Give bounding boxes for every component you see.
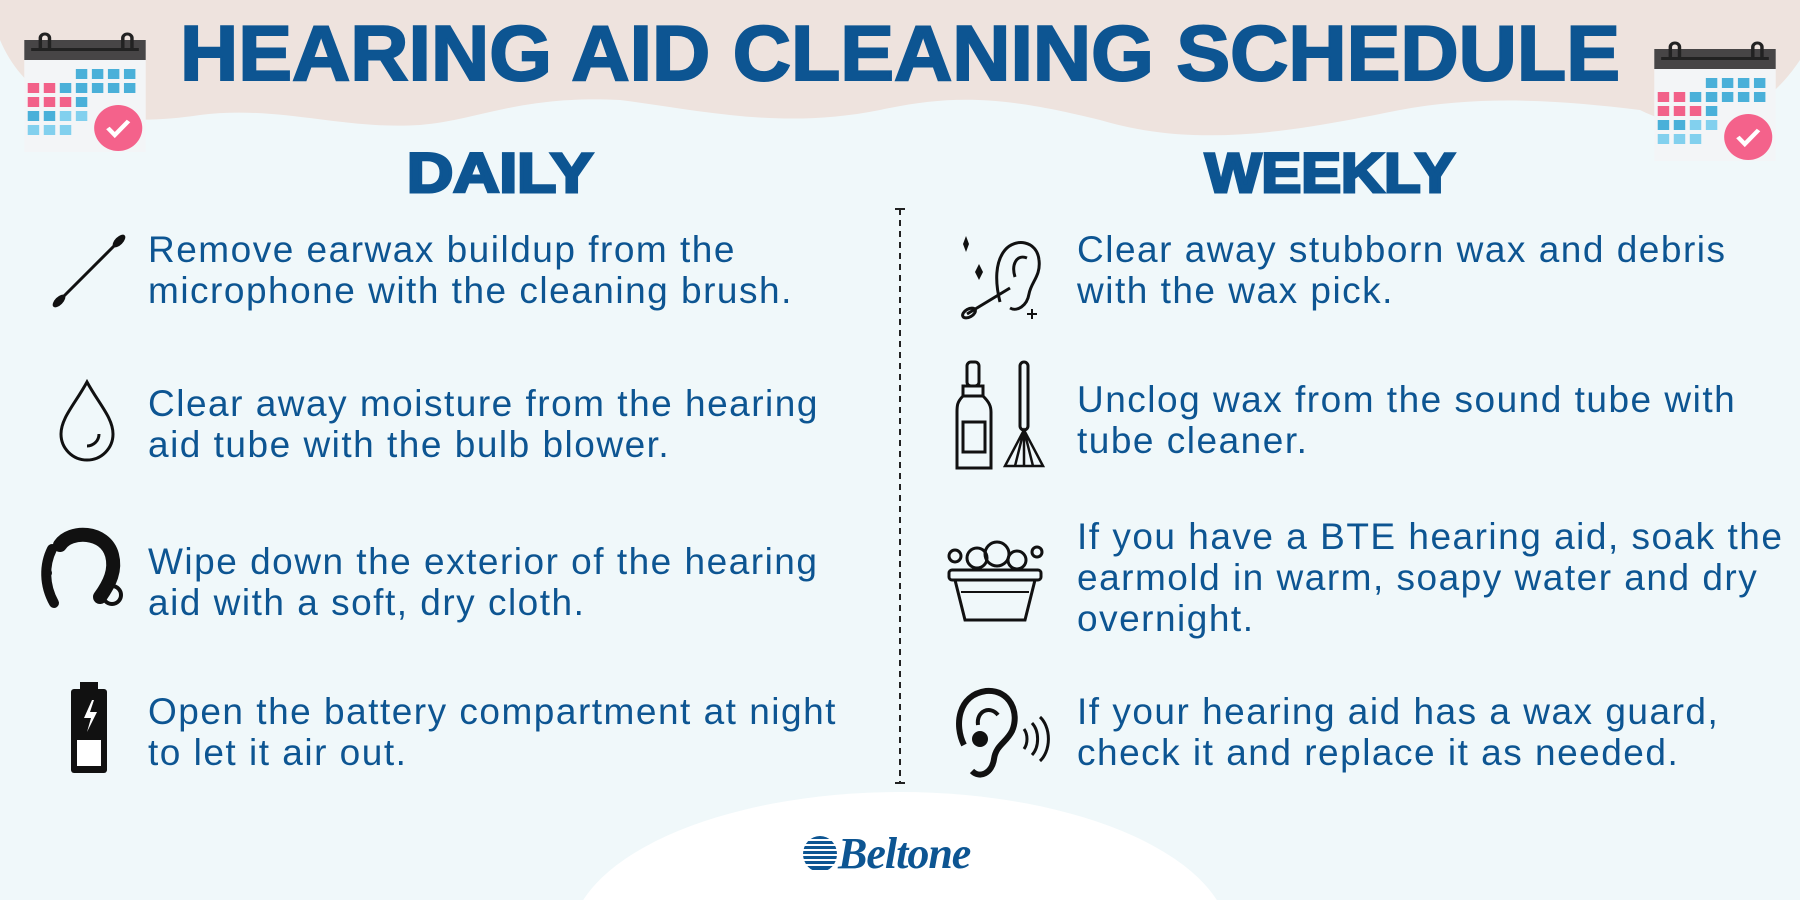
text: weekly 2 (1077, 379, 1736, 461)
text: weekly 3: overnight. (1077, 598, 1254, 639)
icon: battery (71, 682, 107, 773)
text: daily 1 (148, 229, 793, 311)
text: weekly 4 (1077, 691, 1719, 773)
text: daily 3 (148, 541, 818, 623)
white ellipse bottom (584, 792, 1216, 900)
text: weekly 4: check it and replace it as needed. (1077, 732, 1679, 773)
icon: water drop (60, 379, 114, 462)
text: weekly 1: Clear away stubborn wax and debris (1077, 229, 1726, 270)
icon: cleaning brush (52, 234, 126, 308)
text: daily 2: aid tube with the bulb blower. (148, 424, 670, 465)
text: weekly 4: If your hearing aid has a wax guard, (1077, 691, 1719, 732)
icon: ear with swab (961, 236, 1041, 320)
icon: calendar left (24, 32, 146, 151)
icon: calendar right (1654, 42, 1776, 160)
text: daily 3: Wipe down the exterior of the hearing (148, 541, 818, 582)
text: weekly 3: earmold in warm, soapy water and dry (1077, 557, 1758, 598)
text: weekly 3 (1077, 516, 1783, 639)
text: daily 4 (148, 691, 837, 773)
text: daily 1: microphone with the cleaning brush. (148, 270, 793, 311)
text: weekly 2: tube cleaner. (1077, 420, 1308, 461)
text: weekly 3: If you have a BTE hearing aid, soak the (1077, 516, 1783, 557)
text: daily 2 (148, 383, 819, 465)
background wave top (0, 0, 1800, 136)
icon: bottle and tube cleaner (956, 360, 1045, 470)
text: daily 3: aid with a soft, dry cloth. (148, 582, 585, 623)
text: weekly 1: with the wax pick. (1077, 270, 1394, 311)
title: HEARING AID CLEANING SCHEDULE (180, 9, 1620, 97)
icon: soapy bowl (948, 540, 1044, 622)
dashed divider (895, 208, 905, 784)
text: weekly 2: Unclog wax from the sound tube with (1077, 379, 1736, 420)
text: daily 4: Open the battery compartment at night (148, 691, 837, 732)
icon: ear with hearing aid (956, 688, 1050, 778)
logo: Beltone: Beltone (838, 829, 970, 878)
text: daily 4: to let it air out. (148, 732, 407, 773)
text: daily 1: Remove earwax buildup from the (148, 229, 736, 270)
text: weekly 1 (1077, 229, 1726, 311)
icon: hearing aid (41, 528, 123, 608)
text: daily 2: Clear away moisture from the hearing (148, 383, 819, 424)
